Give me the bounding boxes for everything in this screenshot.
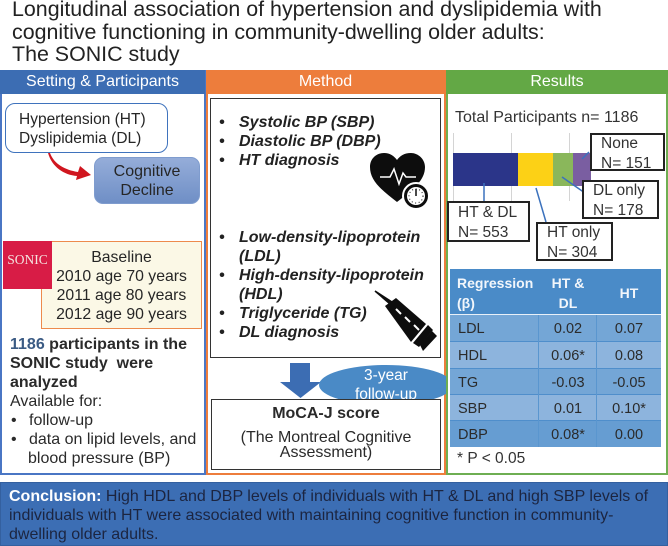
label: HT only: N= 304 xyxy=(547,244,597,260)
text block: participants: data on lipid levels, and xyxy=(29,431,196,448)
list: lipid measures: • xyxy=(219,229,225,246)
text block: participants: 1186 participants in the xyxy=(10,336,187,353)
list: lipid measures: Triglyceride (TG) xyxy=(239,305,367,322)
box: MoCA-J score xyxy=(211,399,441,470)
label: HT only xyxy=(536,222,613,261)
row: TG xyxy=(450,369,661,395)
list: blood pressure measures: HT diagnosis xyxy=(239,152,339,169)
box: baseline cohorts: Baseline xyxy=(91,249,152,266)
list: blood pressure measures: • xyxy=(219,133,225,150)
list: lipid measures: Low-density-lipoprotein xyxy=(239,229,420,246)
label: none xyxy=(590,133,665,171)
row: LDL: 0.02 xyxy=(554,321,582,337)
text block: participants: blood pressure (BP) xyxy=(28,450,170,467)
heading: method xyxy=(206,70,445,94)
table header: (β) xyxy=(457,295,475,311)
row: DBP: 0.00 xyxy=(615,427,643,443)
box: cognitive decline: Cognitive xyxy=(114,163,180,180)
panel: conclusion: individuals with HT were associated with maintaining cognitive function in community- xyxy=(9,507,613,524)
label: HT and DL xyxy=(447,201,530,242)
box: MoCA-J score: (The Montreal Cognitive xyxy=(241,429,411,446)
list: lipid measures: DL diagnosis xyxy=(239,324,339,341)
row: LDL: 0.07 xyxy=(615,321,643,337)
box: baseline cohorts xyxy=(41,241,202,329)
heading: setting and participants: Setting & Participants xyxy=(26,73,179,90)
table header: HT & xyxy=(552,275,584,291)
oval: 3-year follow-up: follow-up xyxy=(355,386,417,402)
table header: DL xyxy=(559,295,577,311)
heading: results xyxy=(446,70,668,94)
box: cognitive decline xyxy=(94,157,200,204)
heading: method: Method xyxy=(299,73,352,90)
list: lipid measures: (LDL) xyxy=(239,248,281,265)
text block: participants: Available for: xyxy=(10,393,102,410)
label: DL only: DL only xyxy=(593,182,645,199)
label: DL only: N= 178 xyxy=(593,202,643,218)
text block: participants: SONIC study were xyxy=(10,355,153,372)
table header: Regression xyxy=(457,275,533,291)
text box: risk factors: Hypertension (HT) xyxy=(19,111,146,128)
label: HT and DL: N= 553 xyxy=(458,224,508,240)
heading: setting and participants xyxy=(0,70,205,94)
panel: results xyxy=(446,70,668,475)
list: lipid measures xyxy=(219,229,424,341)
label: none: N= 151 xyxy=(601,154,651,172)
text block: participants xyxy=(10,336,196,467)
list: blood pressure measures: Diastolic BP (DBP) xyxy=(239,133,381,150)
stacked bar chart xyxy=(453,133,591,222)
row: TG: TG xyxy=(458,375,478,391)
text block: participants: analyzed xyxy=(10,374,78,391)
panel: conclusion xyxy=(0,482,668,546)
row: SBP: SBP xyxy=(458,401,487,417)
box: baseline cohorts: 2011 age 80 years xyxy=(57,287,186,304)
label: HT only: HT only xyxy=(547,224,600,241)
icon: syringe xyxy=(374,290,437,351)
text box: risk factors: Dyslipidemia (DL) xyxy=(19,130,141,147)
panel: method xyxy=(206,70,446,475)
arrow: curved red arrow to cognitive decline xyxy=(48,153,91,180)
table header xyxy=(450,269,661,315)
list: lipid measures: • xyxy=(219,305,225,322)
box: measures list xyxy=(210,98,441,358)
title: cognitive functioning in community-dwelling older adults: xyxy=(12,20,545,44)
footnote: significance: * P < 0.05 xyxy=(457,450,525,467)
row: SBP: 0.10* xyxy=(612,401,646,417)
row: HDL: 0.08 xyxy=(615,348,643,364)
list: lipid measures: (HDL) xyxy=(239,286,283,303)
text box: risk factors xyxy=(5,103,168,153)
row: DBP: 0.08* xyxy=(551,427,585,443)
row: HDL xyxy=(450,342,661,369)
title: The SONIC study xyxy=(12,42,180,66)
box: baseline cohorts: 2010 age 70 years xyxy=(56,268,187,285)
box: cognitive decline: Decline xyxy=(120,182,174,199)
label: HT and DL: HT & DL xyxy=(458,204,517,221)
oval: 3-year follow-up: 3-year xyxy=(364,367,408,384)
box: baseline cohorts: 2012 age 90 years xyxy=(56,306,187,323)
table: regression coefficients xyxy=(450,269,661,447)
panel: conclusion: dwelling older adults. xyxy=(9,526,158,543)
row: LDL: LDL xyxy=(458,321,485,337)
row: TG: -0.03 xyxy=(551,375,585,391)
oval: 3-year follow-up xyxy=(319,365,453,405)
logo: SONIC xyxy=(3,241,52,289)
row: SBP: 0.01 xyxy=(554,401,582,417)
label: none: None xyxy=(601,135,638,152)
logo: SONIC: SONIC xyxy=(7,252,48,267)
panel: setting and participants xyxy=(0,70,206,475)
row: HDL: HDL xyxy=(458,348,487,364)
list: blood pressure measures xyxy=(219,114,381,169)
list: blood pressure measures: Systolic BP (SBP) xyxy=(239,114,374,131)
row: TG: -0.05 xyxy=(612,375,646,391)
title xyxy=(12,0,602,66)
arrow: down to MoCA-J xyxy=(280,363,320,398)
text block: participants: follow-up xyxy=(29,412,93,429)
text block: participants: • xyxy=(11,431,17,448)
text block: participants: • xyxy=(11,412,17,429)
list: blood pressure measures: • xyxy=(219,152,225,169)
list: lipid measures: • xyxy=(219,267,225,284)
column dividers xyxy=(538,315,597,447)
heading: results: Results xyxy=(530,73,584,90)
label: DL only xyxy=(582,180,659,219)
table header: HT xyxy=(620,285,638,301)
text: total participants: Total Participants n= 1186 xyxy=(455,109,638,126)
list: lipid measures: • xyxy=(219,324,225,341)
row: HDL: 0.06* xyxy=(551,348,585,364)
icon: heart with pulse and gauge xyxy=(370,153,428,208)
row: SBP xyxy=(450,395,661,421)
box: MoCA-J score: Assessment) xyxy=(280,444,372,461)
row: DBP: DBP xyxy=(458,427,488,443)
list: blood pressure measures: • xyxy=(219,114,225,131)
row: DBP xyxy=(450,421,661,447)
panel: conclusion: Conclusion: High HDL and DBP levels of individuals with HT & DL and high SBP levels of xyxy=(9,488,648,505)
box: MoCA-J score: MoCA-J score xyxy=(272,405,380,422)
row: LDL xyxy=(450,315,661,342)
list: lipid measures: High-density-lipoprotein xyxy=(239,267,424,284)
